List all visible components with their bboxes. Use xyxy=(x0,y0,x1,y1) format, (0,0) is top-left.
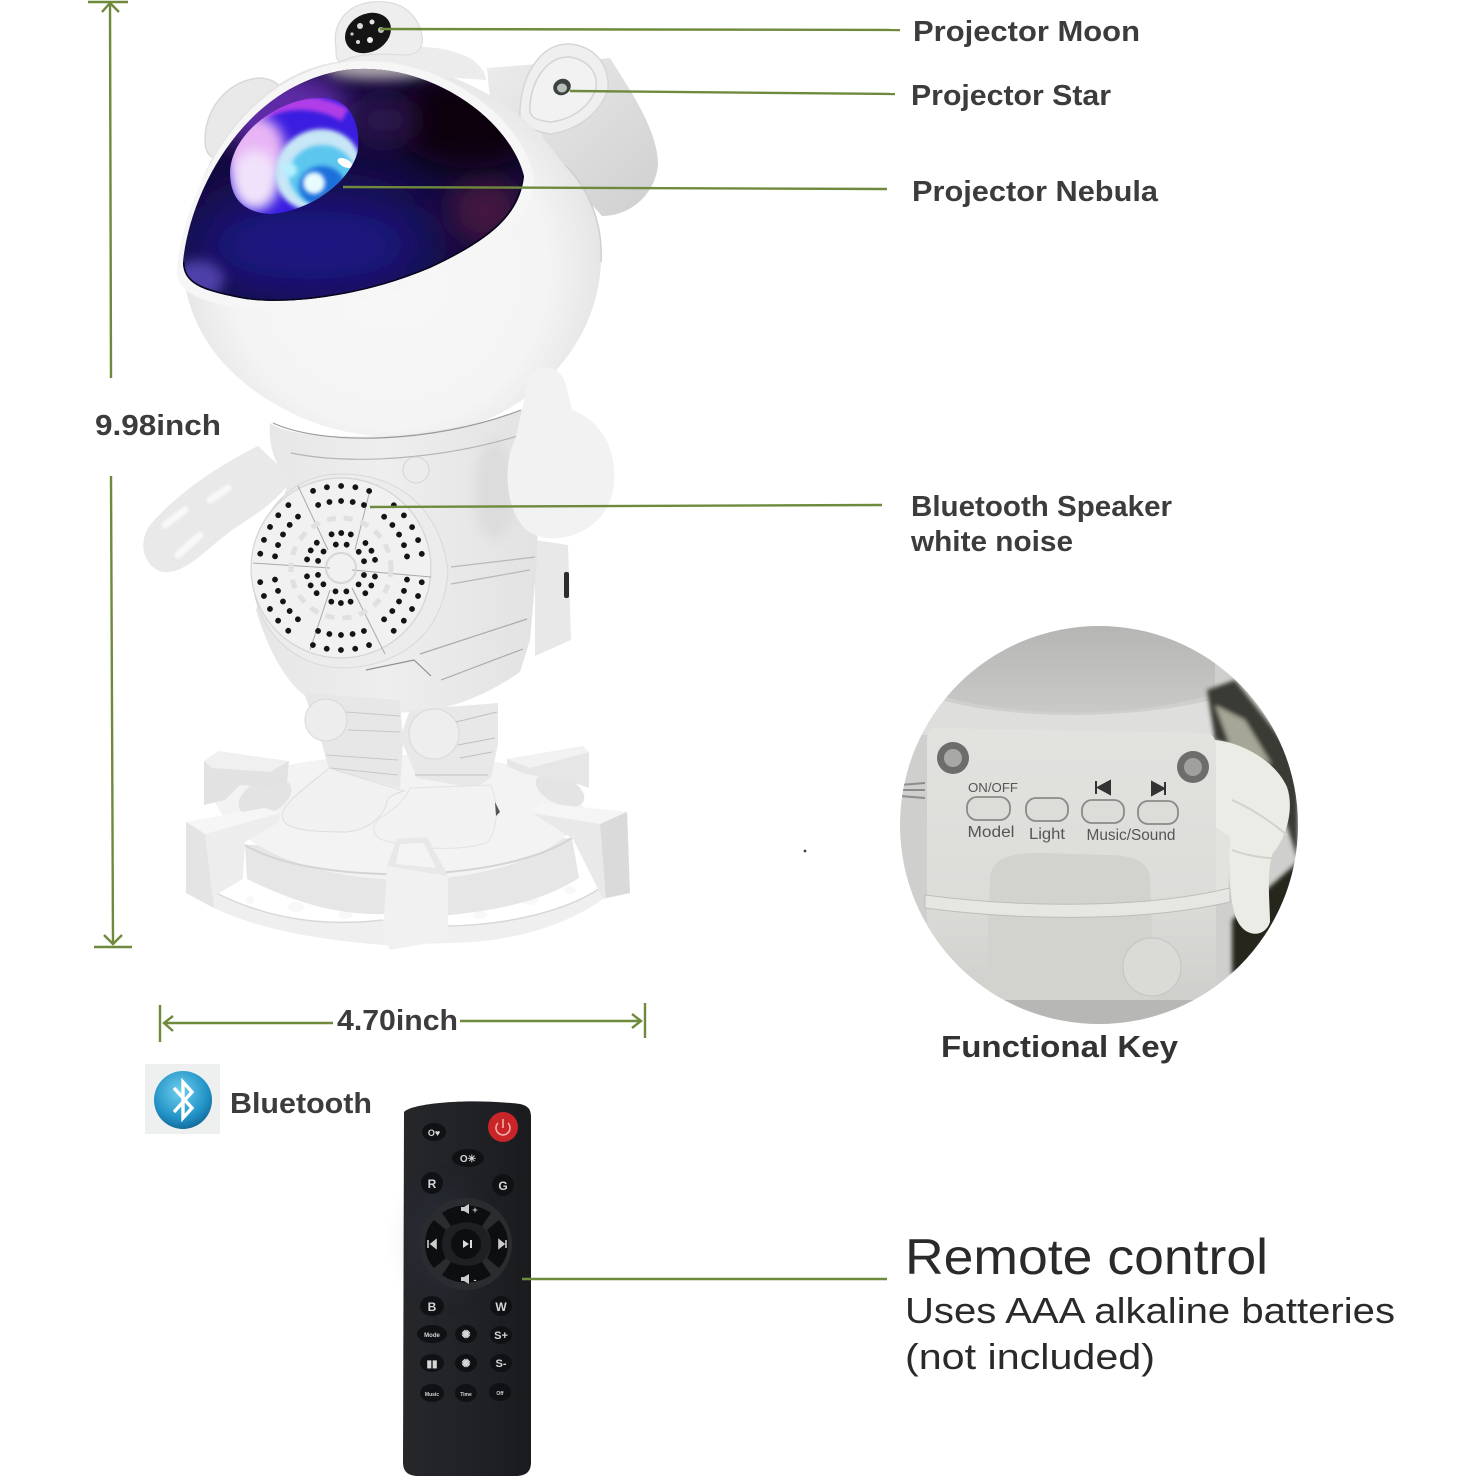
stray dot xyxy=(804,850,806,852)
remote key labels: Music xyxy=(425,1392,439,1398)
functional key inset xyxy=(895,620,1305,1030)
label: bluetooth speaker: Bluetooth Speaker xyxy=(911,491,1172,523)
label: bluetooth speaker: white noise xyxy=(910,526,1073,558)
inset side lump xyxy=(1216,828,1230,890)
speaker holes xyxy=(246,473,436,663)
mid left block xyxy=(186,808,280,908)
base platform xyxy=(214,755,589,915)
remote sheen xyxy=(415,1190,475,1290)
width label: 4.70inch xyxy=(337,1005,458,1037)
moon projector xyxy=(335,2,486,80)
remote key labels: W xyxy=(495,1300,507,1314)
inset white band xyxy=(922,701,1214,735)
inset previous icon xyxy=(1096,781,1110,794)
power button xyxy=(488,1112,518,1142)
speaker grille xyxy=(246,473,436,663)
remote key labels: ✺ xyxy=(461,1329,471,1341)
height dimension arrow xyxy=(88,2,132,947)
note: batteries: Uses AAA alkaline batteries xyxy=(905,1290,1395,1331)
remote key labels: G xyxy=(498,1179,508,1193)
inset striped detail xyxy=(900,783,925,798)
remote key labels: ▮▮ xyxy=(426,1359,438,1370)
right raised arm xyxy=(508,367,614,538)
inset screws xyxy=(937,742,1209,783)
remote key labels: Time xyxy=(460,1392,472,1398)
left leg xyxy=(282,693,404,832)
arm shadow on torso xyxy=(475,440,515,540)
inset buttons xyxy=(967,797,1178,824)
inset button labels: Music/Sound xyxy=(1086,827,1176,844)
label: projector moon: Projector Moon xyxy=(913,16,1140,48)
remote round keys xyxy=(417,1123,514,1402)
remote key labels: B xyxy=(428,1300,437,1314)
remote key labels: R xyxy=(428,1177,437,1191)
inset control panel xyxy=(927,728,1216,1000)
inset button labels xyxy=(968,780,1176,844)
inset lower shading xyxy=(1004,1000,1194,1024)
label: projector star: Projector Star xyxy=(911,80,1111,112)
head shell xyxy=(183,60,601,437)
backpack side unit xyxy=(535,540,571,656)
label: projector nebula: Projector Nebula xyxy=(912,176,1159,208)
inset button labels: Light xyxy=(1029,826,1066,843)
remote key labels: S- xyxy=(496,1358,507,1370)
chest button xyxy=(403,457,429,483)
nebula lens xyxy=(230,98,358,214)
inset next icon xyxy=(1152,782,1165,795)
remote d-pad: - xyxy=(474,1275,476,1285)
inset knob xyxy=(1123,938,1181,996)
callout line: projector nebula xyxy=(343,187,887,189)
inset button labels: ON/OFF xyxy=(968,780,1018,795)
back left block xyxy=(204,751,289,805)
mid right block xyxy=(532,803,630,899)
left arm xyxy=(143,446,292,572)
front centre block xyxy=(383,837,448,950)
remote key labels: O✳ xyxy=(460,1154,477,1165)
note: batteries xyxy=(905,1290,1395,1377)
callout line: remote control xyxy=(522,1278,887,1280)
remote control xyxy=(403,1101,531,1476)
inset dark surroundings xyxy=(1207,680,1300,975)
height label: 9.98inch xyxy=(95,410,221,442)
remote key labels: Mode xyxy=(424,1333,440,1339)
label: bluetooth speaker xyxy=(910,491,1172,558)
right leg xyxy=(374,703,500,848)
remote key labels: S+ xyxy=(494,1330,508,1342)
inset background xyxy=(895,620,1305,1030)
speaker sector lines xyxy=(253,486,431,654)
right ear projector housing xyxy=(520,44,608,134)
astronaut product illustration xyxy=(143,2,658,950)
callout line: projector star xyxy=(570,91,895,94)
speaker rim xyxy=(252,474,448,668)
label: functional key: Functional Key xyxy=(941,1029,1179,1064)
remote body xyxy=(403,1101,531,1476)
inset arm xyxy=(1215,740,1290,934)
backpack behind head xyxy=(487,58,658,216)
inset band xyxy=(925,888,1230,917)
heading: remote control: Remote control xyxy=(905,1229,1268,1285)
callout line: bluetooth speaker xyxy=(370,505,882,507)
callout line: projector moon xyxy=(380,29,900,30)
remote key labels xyxy=(424,1128,508,1398)
note: batteries: (not included) xyxy=(905,1336,1155,1377)
base lower ring xyxy=(214,886,603,945)
torso xyxy=(256,410,540,713)
left ear xyxy=(205,78,280,160)
inset backpack lump xyxy=(990,853,1150,904)
back right block xyxy=(507,746,589,788)
remote key labels: Off xyxy=(496,1391,504,1397)
right head curve xyxy=(565,165,601,262)
inset button labels: Model xyxy=(968,824,1014,841)
inset upper dome xyxy=(946,626,1215,704)
remote d-pad: + xyxy=(472,1205,478,1215)
remote key labels: ✺ xyxy=(461,1358,471,1370)
remote key labels: O♥ xyxy=(428,1128,440,1138)
base blocks xyxy=(186,746,630,950)
icon: bluetooth xyxy=(145,1064,220,1134)
label: bluetooth: Bluetooth xyxy=(230,1088,372,1120)
visor rim xyxy=(177,61,534,311)
width dimension arrow xyxy=(160,1003,645,1042)
remote d-pad xyxy=(420,1198,512,1290)
visor glass xyxy=(183,68,524,301)
collar and body seams xyxy=(273,410,535,680)
